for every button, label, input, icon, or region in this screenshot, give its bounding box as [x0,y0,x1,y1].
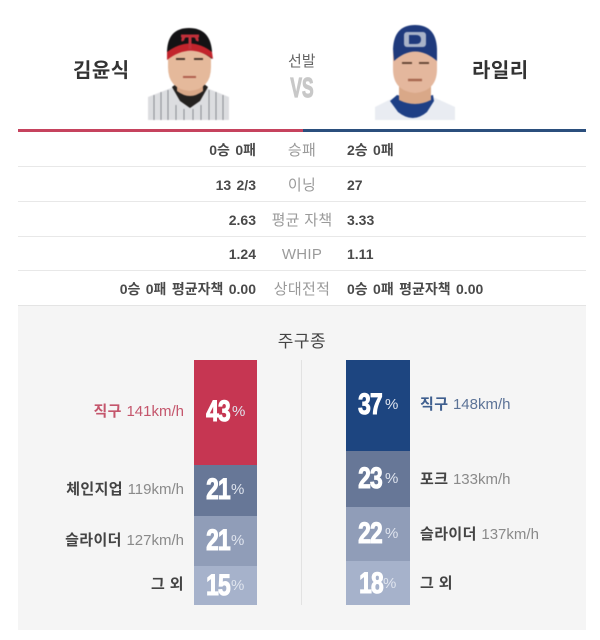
bar segment: left slider [194,516,257,566]
stat row: WHIP: WHIP [282,246,322,263]
stat row: ERA: 3.33 [347,212,374,228]
player name: right pitcher: 라일리 [472,60,529,82]
bar segment: left fastball: % [232,403,245,420]
stat row: head to head: 상대전적 [274,281,330,298]
label: left other: 그 외 [151,576,184,593]
bar segment: right fastball: % [385,396,398,413]
stat row: head to head: 0승 0패 평균자책 0.00 [120,281,256,297]
label: right fastball: 직구 148km/h [420,396,511,413]
bar segment: left other: % [231,577,244,594]
bar segment: left fastball [194,360,257,464]
player photo: right pitcher [375,24,455,120]
stat row: innings: 27 [347,177,363,193]
label: left slider: 슬라이더 127km/h [65,532,184,549]
bar segment: left changeup: % [231,481,244,498]
bar segment: right forkball: % [385,470,398,487]
stat row: ERA: 평균 자책 [272,212,332,229]
stat row: wins and losses [209,142,394,159]
bar segment: right other: % [383,575,396,592]
bar segment: left changeup [194,464,257,516]
stat row: ERA [229,212,374,229]
stat row: head to head: 0승 0패 평균자책 0.00 [347,281,483,297]
label: starting pitcher: 선발 [288,53,316,70]
stats table [18,142,586,298]
player name: left pitcher: 김윤식 [73,60,130,82]
stat row: innings: 13 2/3 [216,177,256,193]
bar segment: right slider: % [385,525,398,542]
label: right forkball: 포크 133km/h [420,471,511,488]
stat row: innings: 이닝 [288,177,316,194]
VS mark: VS [290,72,314,103]
bar segment: right slider [346,507,410,561]
bar segment: right other [346,561,410,605]
stat row: ERA: 2.63 [229,212,256,228]
stat row: innings [216,177,363,194]
bar segment: left slider: 21 [206,524,230,557]
bar segment: left fastball: 43 [206,395,229,428]
label: right slider: 슬라이더 137km/h [420,526,539,543]
stat row: WHIP [229,246,374,263]
label: left changeup: 체인지업 119km/h [66,481,184,498]
bar segment: left changeup: 21 [206,473,230,506]
bar segment: right fastball: 37 [358,388,381,421]
player photo: left pitcher [148,27,230,120]
bar segment: right fastball [346,360,410,451]
bar segment: left other [194,566,257,605]
bar segment: left slider: % [231,532,244,549]
bar segment: right slider: 22 [358,517,382,550]
bar segment: right forkball: 23 [358,462,382,495]
label: right other: 그 외 [420,575,453,592]
bar segment: right other: 18 [359,567,382,600]
panel: pitch mix [18,305,586,630]
bar segment: right forkball [346,451,410,507]
stat row: WHIP: 1.24 [229,246,256,262]
stat row: wins and losses: 승패 [288,142,316,159]
label: left fastball: 직구 141km/h [93,403,184,420]
heading: pitch mix: 주구종 [278,332,326,351]
stat row: head to head [120,281,483,298]
team colour rule [18,129,586,132]
stat row: wins and losses: 0승 0패 [209,142,256,158]
stat row: WHIP: 1.11 [347,246,373,262]
stat row: wins and losses: 2승 0패 [347,142,394,158]
bar segment: left other: 15 [206,569,230,602]
